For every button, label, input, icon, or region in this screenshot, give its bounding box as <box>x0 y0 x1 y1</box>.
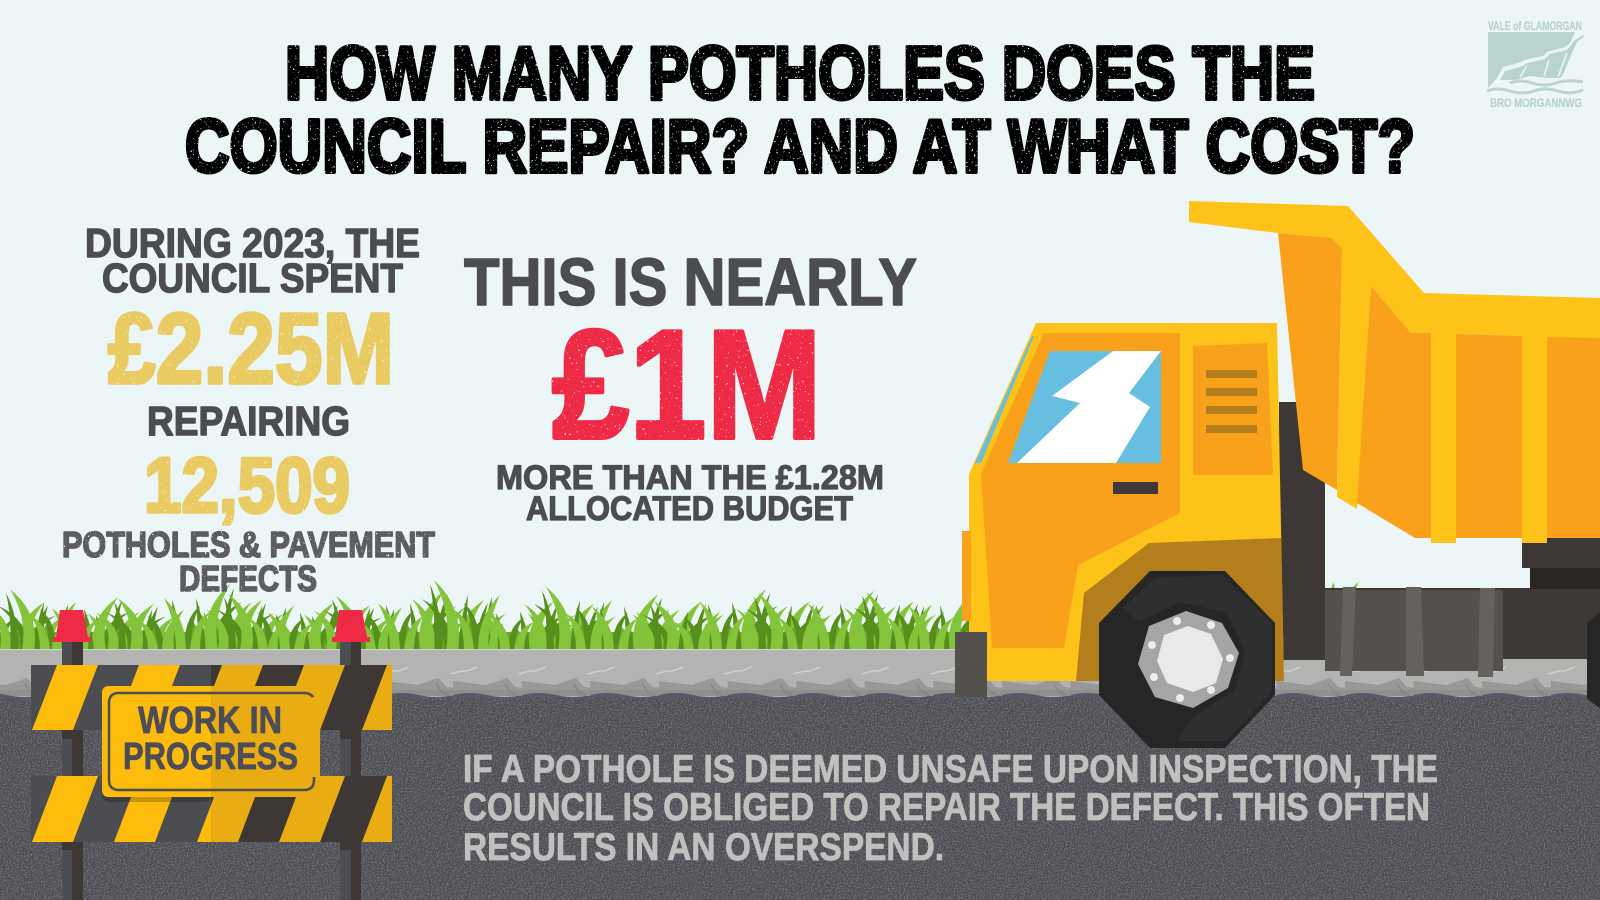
text block: explanation on road: IF A POTHOLE IS DEEMED UNSAFE UPON INSPECTION, THE <box>463 748 1438 791</box>
caption: allocated budget: ALLOCATED BUDGET <box>526 490 853 528</box>
roadworks sign <box>31 610 428 900</box>
label: repairing: REPAIRING <box>147 398 350 444</box>
pavement <box>0 649 1600 701</box>
icon: warning light left <box>53 610 91 642</box>
label: potholes and pavement defects: DEFECTS <box>179 558 317 599</box>
label: potholes and pavement defects <box>62 524 435 599</box>
title <box>185 31 1415 188</box>
striped barrier boards <box>31 665 428 842</box>
work in progress placard <box>102 686 320 802</box>
caption: allocated budget <box>496 459 884 528</box>
text block: spending figures <box>62 220 435 599</box>
tipper bed <box>1189 201 1600 543</box>
heading: during 2023: COUNCIL SPENT <box>102 255 403 301</box>
figure: £1M overspend: £1M <box>552 298 822 471</box>
logo: Vale of Glamorgan <box>1487 19 1584 110</box>
sign posts <box>62 642 361 900</box>
heading: during 2023: DURING 2023, THE <box>85 220 420 266</box>
work in progress placard: PROGRESS <box>123 736 298 778</box>
text block: explanation on road: RESULTS IN AN OVERSPEND. <box>463 826 944 869</box>
text block: explanation on road <box>463 748 1438 869</box>
caption: allocated budget: MORE THAN THE £1.28M <box>496 459 884 497</box>
heading: this is nearly: THIS IS NEARLY <box>464 245 917 320</box>
icon: cab window with glare <box>1008 351 1161 463</box>
label: potholes and pavement defects: POTHOLES & PAVEMENT <box>62 524 435 565</box>
asphalt road <box>0 698 1600 900</box>
truck chassis <box>1279 402 1600 677</box>
title: HOW MANY POTHOLES DOES THE <box>285 31 1315 115</box>
text block: explanation on road: COUNCIL IS OBLIGED TO REPAIR THE DEFECT. THIS OFTEN <box>463 786 1430 829</box>
heading: during 2023 <box>85 220 420 301</box>
figure: £2.25M spent: £2.25M <box>108 293 394 405</box>
truck cab <box>955 323 1284 697</box>
text block: overspend <box>464 245 917 528</box>
front wheel <box>1099 571 1275 748</box>
icon: warning light right <box>332 610 370 642</box>
work in progress placard: WORK IN <box>138 700 282 742</box>
dump truck <box>955 201 1600 748</box>
rear wheel edge <box>1587 612 1600 708</box>
grass strip <box>0 580 1358 650</box>
figure: 12,509 repairs: 12,509 <box>144 441 350 529</box>
